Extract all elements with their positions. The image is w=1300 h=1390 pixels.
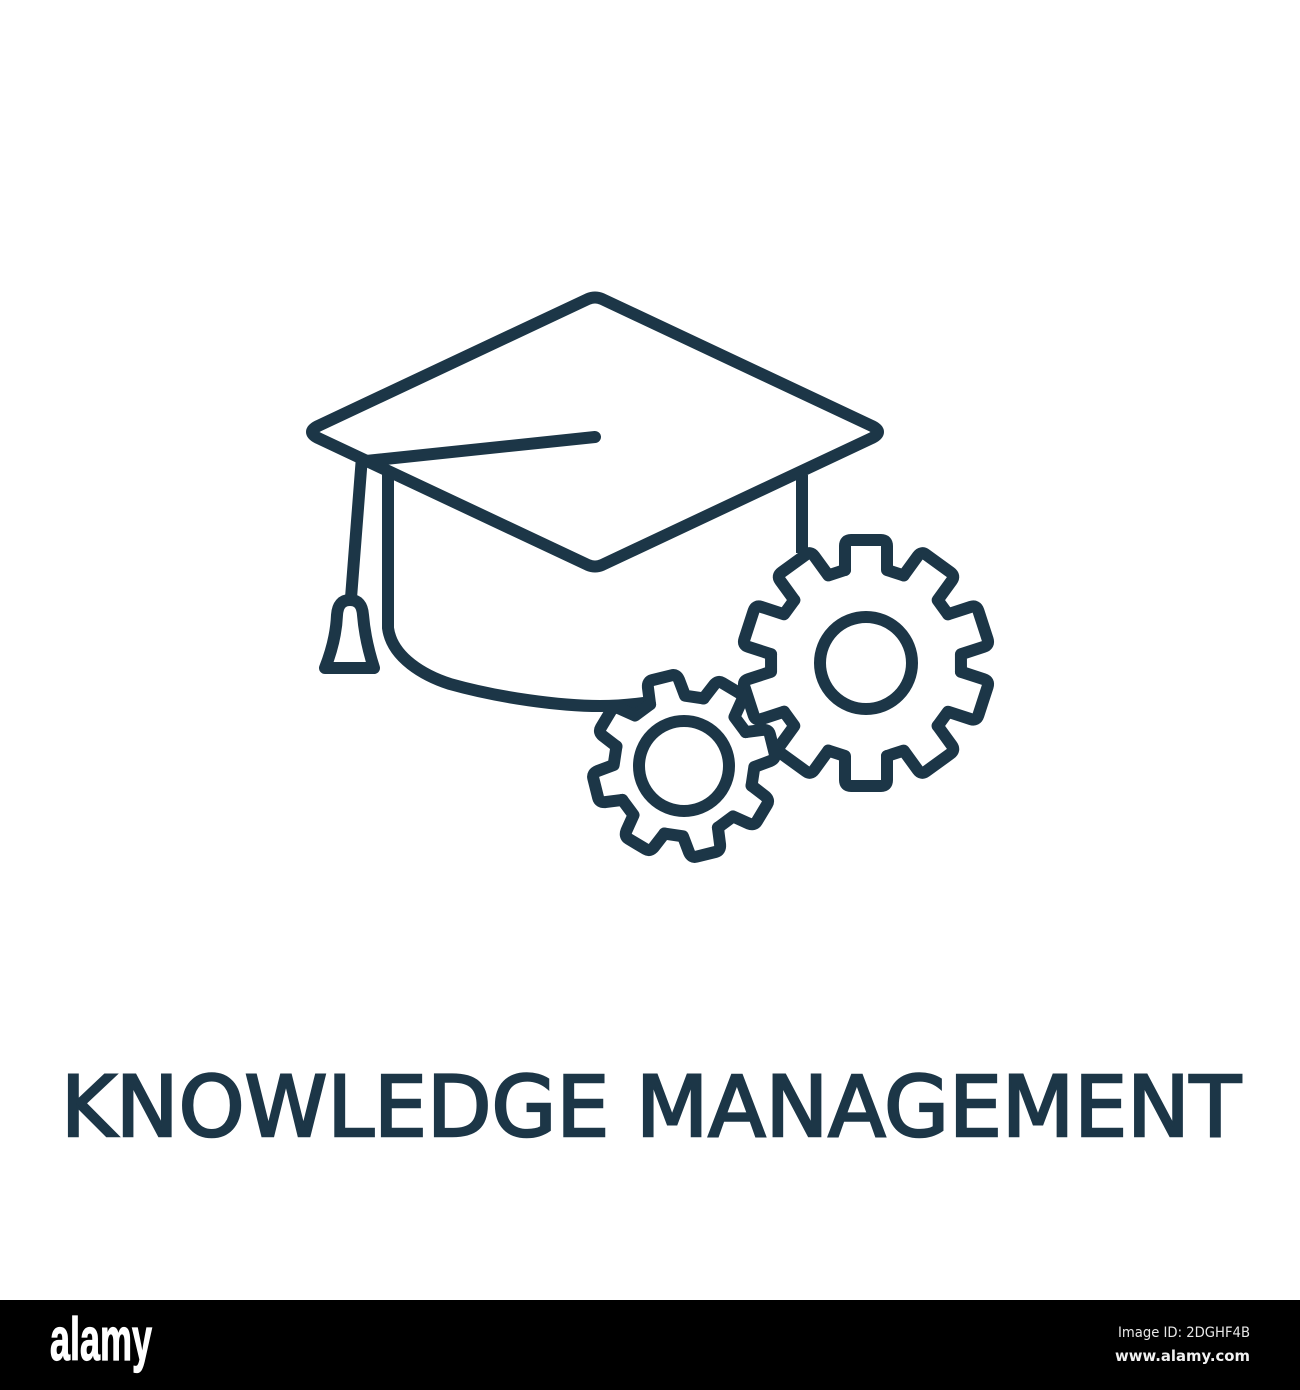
footer logo: alamy xyxy=(50,1306,152,1373)
icon: tassel xyxy=(325,600,374,668)
icon: large gear xyxy=(737,540,995,786)
footer image id: Image ID: 2DGHF4B xyxy=(1118,1325,1250,1341)
icon: knowledge management graduation cap with gears xyxy=(312,298,995,863)
icon: cap body right edge xyxy=(796,475,808,553)
icon: small gear xyxy=(587,669,781,863)
footer website: www.alamy.com xyxy=(1115,1347,1250,1365)
icon: mortarboard top xyxy=(312,298,878,566)
title: KNOWLEDGE MANAGEMENT xyxy=(61,1058,1242,1156)
icon: tassel cord xyxy=(351,437,595,598)
footer bar xyxy=(0,1300,1300,1390)
icon: cap body left and bottom edge xyxy=(388,470,650,706)
